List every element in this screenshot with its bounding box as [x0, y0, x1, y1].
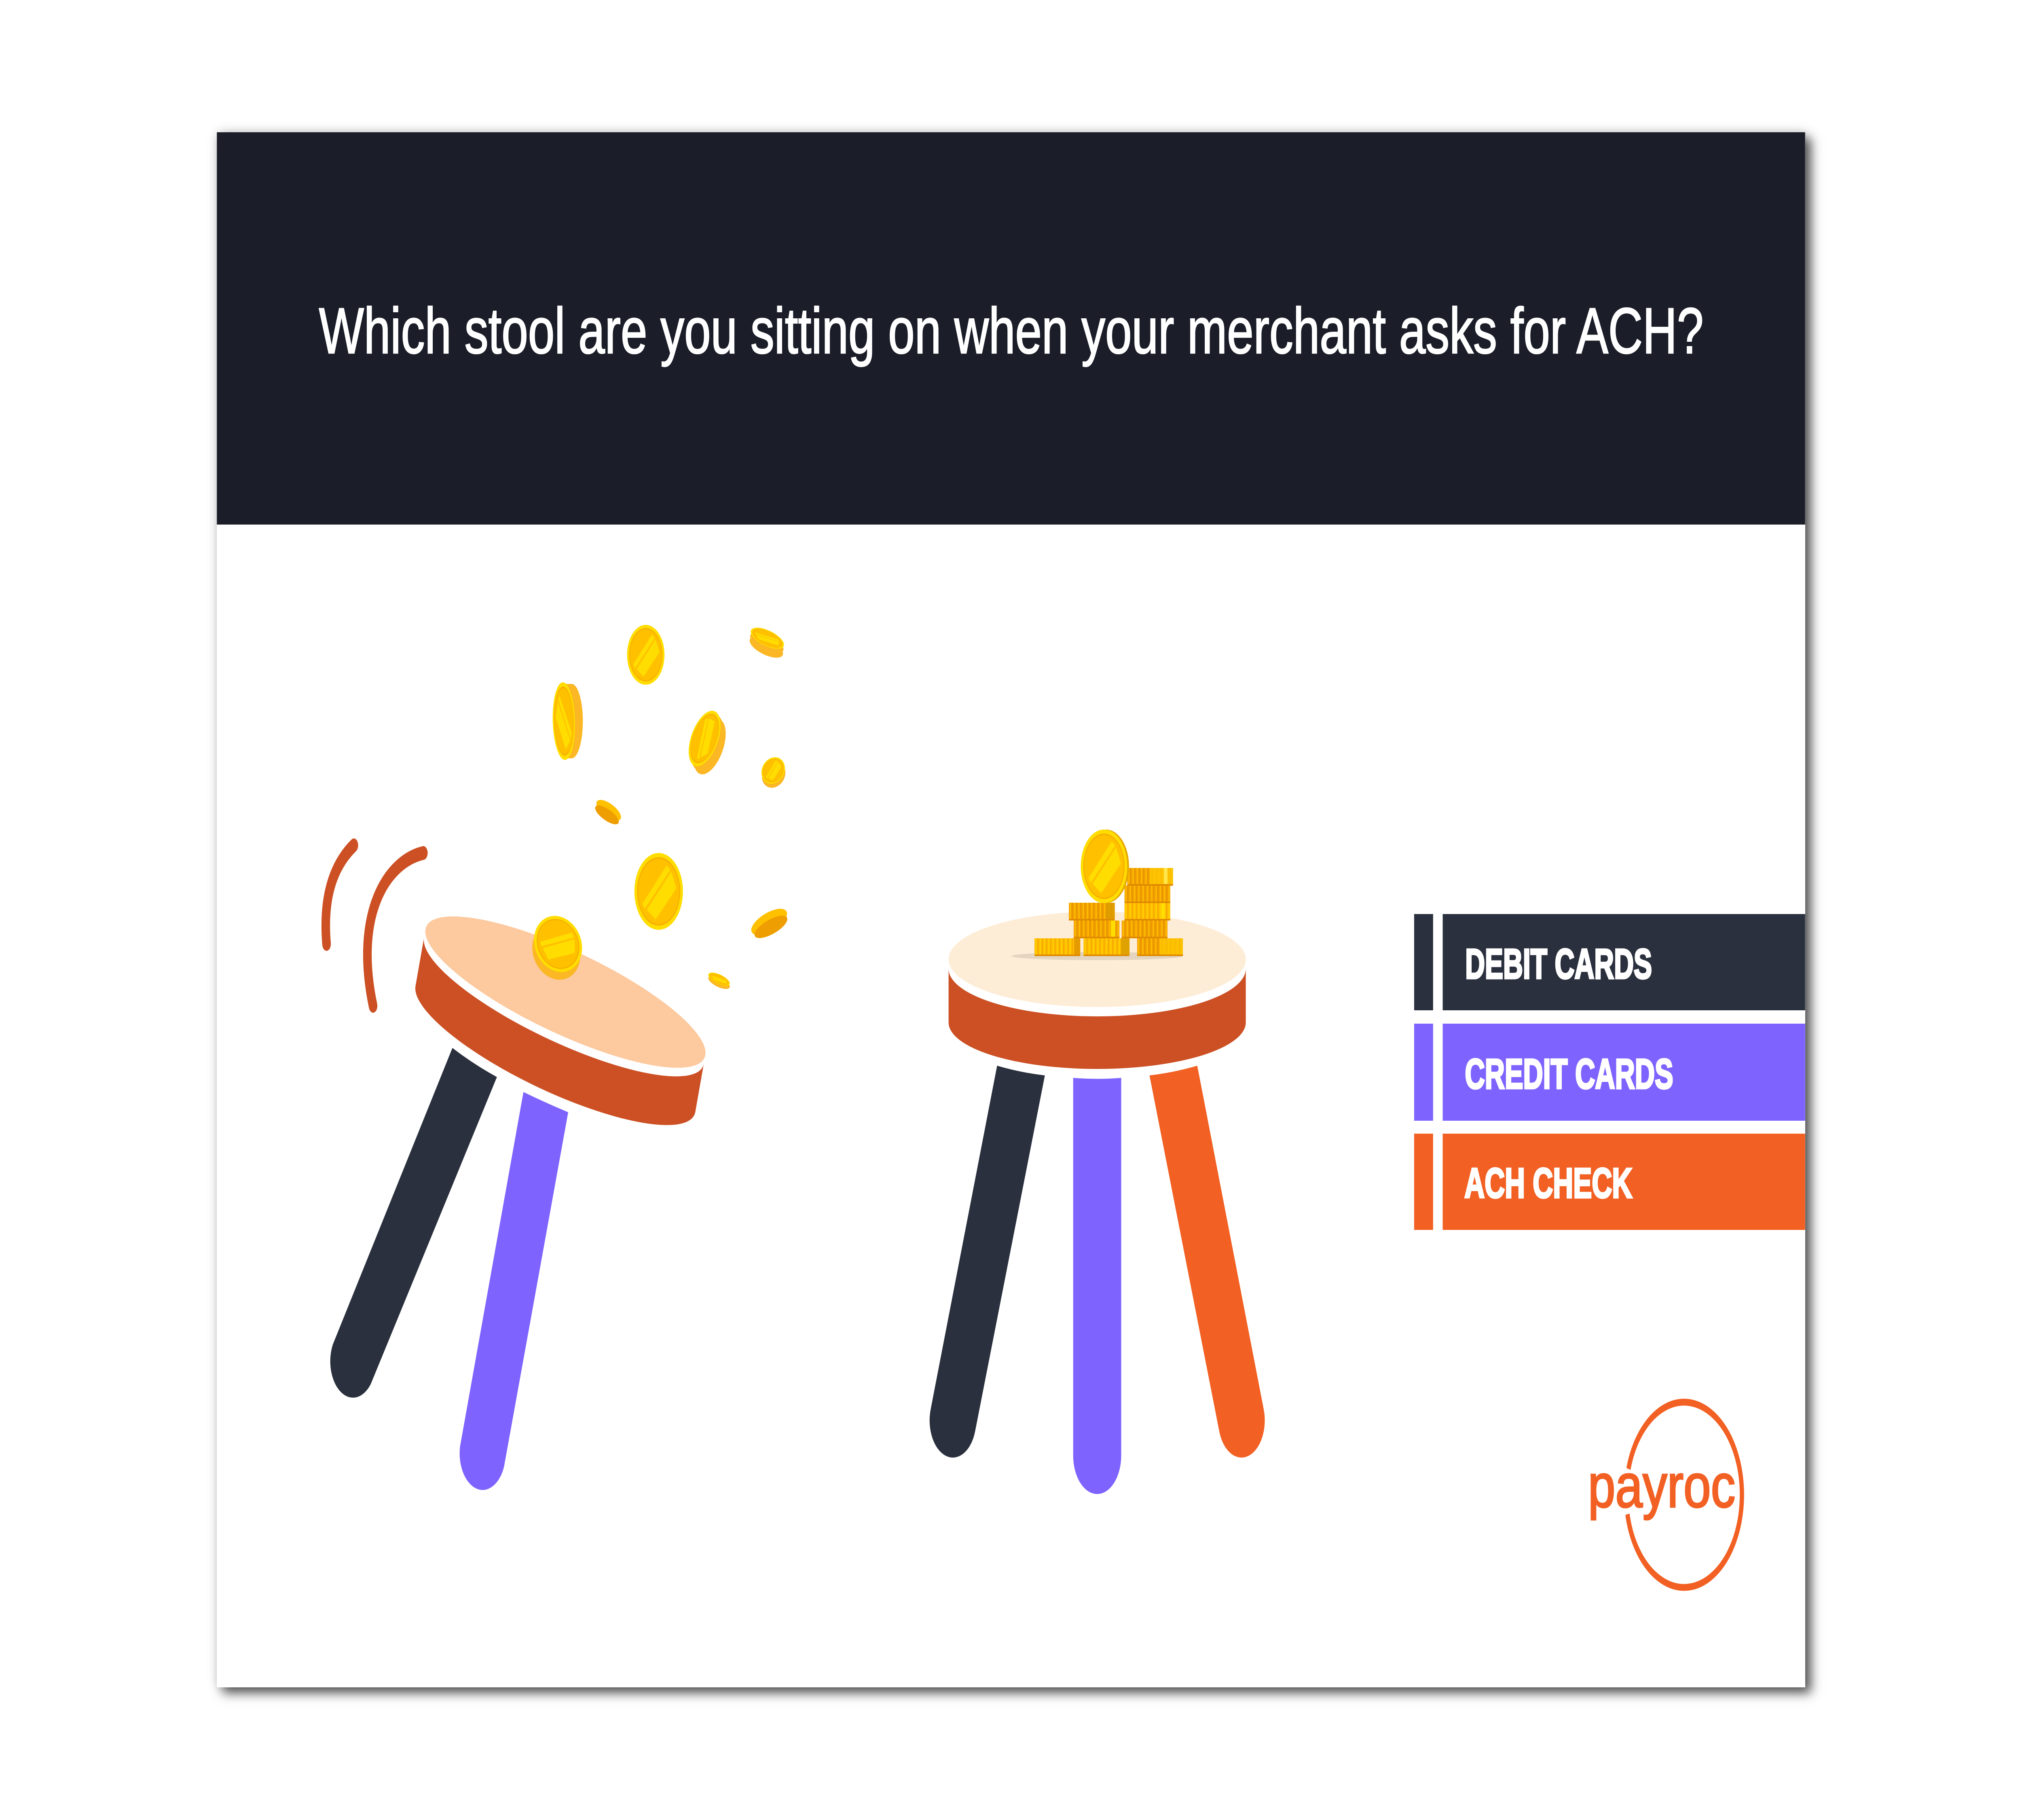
logo: payroc: payroc: [1588, 1451, 1735, 1520]
legend row: credit cards: [1414, 1024, 1805, 1121]
legend row: credit cards: CREDIT CARDS: [1465, 1050, 1673, 1098]
leg: credit cards: [1073, 1078, 1121, 1494]
logo: payroc: [1588, 1402, 1742, 1587]
stable stool with three legs: [930, 830, 1265, 1494]
seat: [949, 912, 1246, 1069]
leg: ach check: [1149, 1066, 1265, 1458]
coin stacks: [1011, 868, 1183, 960]
legend row: ach check: [1414, 1134, 1805, 1230]
legend row: debit cards: DEBIT CARDS: [1465, 940, 1652, 988]
header band: [217, 132, 1805, 525]
legend row: ach check: ACH CHECK: [1464, 1160, 1632, 1207]
coin on tilted seat: [527, 905, 590, 986]
leg: credit cards: [460, 1092, 568, 1490]
title: Which stool are you sitting on when your merchant asks for ACH?: [319, 295, 1704, 367]
leg: debit cards: [330, 1048, 497, 1398]
legend: [1414, 914, 1805, 1230]
leg: debit cards: [930, 1066, 1045, 1458]
falling coins: [552, 625, 791, 992]
tilted seat: [408, 887, 713, 1155]
motion arcs: [326, 845, 423, 1006]
card background with shadow: [217, 132, 1805, 1687]
upright coin: [1081, 830, 1129, 903]
legend row: debit cards: [1414, 914, 1805, 1010]
wobbling stool with two legs: [326, 625, 791, 1490]
